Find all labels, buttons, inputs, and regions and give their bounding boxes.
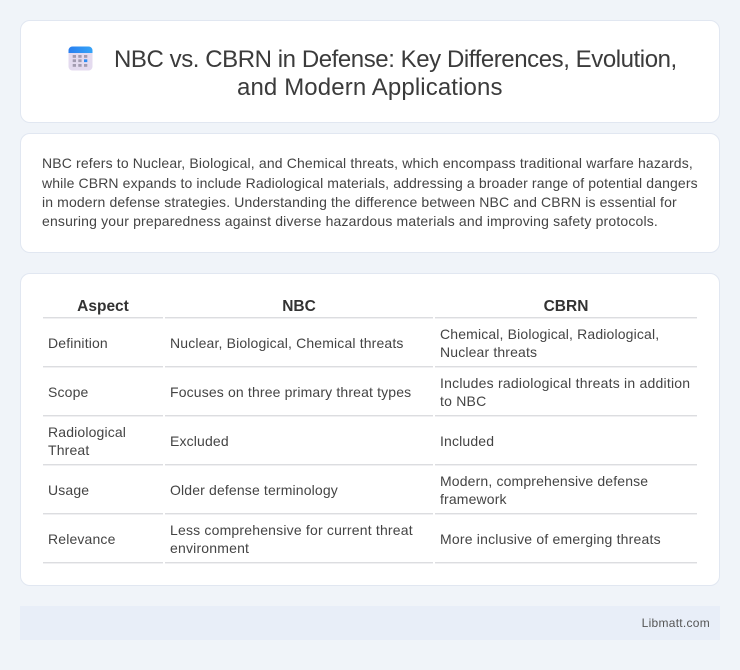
- panel: comparison table: Less comprehensive for current threat: [170, 522, 413, 538]
- row: radiological threat: Radiological: [48, 424, 126, 440]
- panel: comparison table: Focuses on three primary threat types: [170, 384, 411, 400]
- panel: comparison table: Nuclear, Biological, Chemical threats: [170, 335, 404, 351]
- panel: introduction: [20, 133, 720, 253]
- panel: comparison table: CBRN: [544, 298, 588, 315]
- panel: comparison table: Modern, comprehensive defense: [440, 473, 648, 489]
- footer text: Libmatt.com: [642, 616, 710, 630]
- panel: comparison table: Chemical, Biological, Radiological,: [440, 326, 659, 342]
- panel: comparison table: Included: [440, 433, 494, 449]
- panel: comparison table: [20, 273, 720, 586]
- panel: comparison table: environment: [170, 540, 249, 556]
- panel: title card: [20, 20, 720, 123]
- row: usage: Usage: [48, 482, 89, 498]
- table header: Aspect: [77, 298, 129, 315]
- icon: calendar: [68, 46, 92, 70]
- intro line 3: in modern defense strategies. Understanding the difference between NBC and CBRN is essential for: [42, 194, 677, 210]
- panel: comparison table: Excluded: [170, 433, 229, 449]
- panel: comparison table: to NBC: [440, 393, 486, 409]
- intro line 4: ensuring your preparedness against diverse hazardous materials and improving safety protocols.: [42, 213, 658, 229]
- panel: comparison table: Includes radiological threats in addition: [440, 375, 690, 391]
- row: scope: Scope: [48, 384, 88, 400]
- panel: comparison table: NBC: [282, 298, 316, 315]
- row: relevance: Relevance: [48, 531, 116, 547]
- intro line 2: while CBRN expands to include Radiological materials, addressing a broader range of potential dangers: [42, 175, 698, 191]
- title line 1: NBC vs. CBRN in Defense: Key Differences, Evolution,: [114, 46, 677, 73]
- title line 2: and Modern Applications: [237, 74, 503, 101]
- footer: [20, 606, 720, 640]
- row: radiological threat: Threat: [48, 442, 89, 458]
- panel: comparison table: framework: [440, 491, 507, 507]
- panel: comparison table: More inclusive of emerging threats: [440, 531, 661, 547]
- panel: comparison table: Older defense terminology: [170, 482, 338, 498]
- intro line 1: NBC refers to Nuclear, Biological, and Chemical threats, which encompass traditional warfare hazards,: [42, 155, 693, 171]
- panel: comparison table: Nuclear threats: [440, 344, 537, 360]
- row: definition: Definition: [48, 335, 108, 351]
- row: radiological threat: [48, 424, 126, 458]
